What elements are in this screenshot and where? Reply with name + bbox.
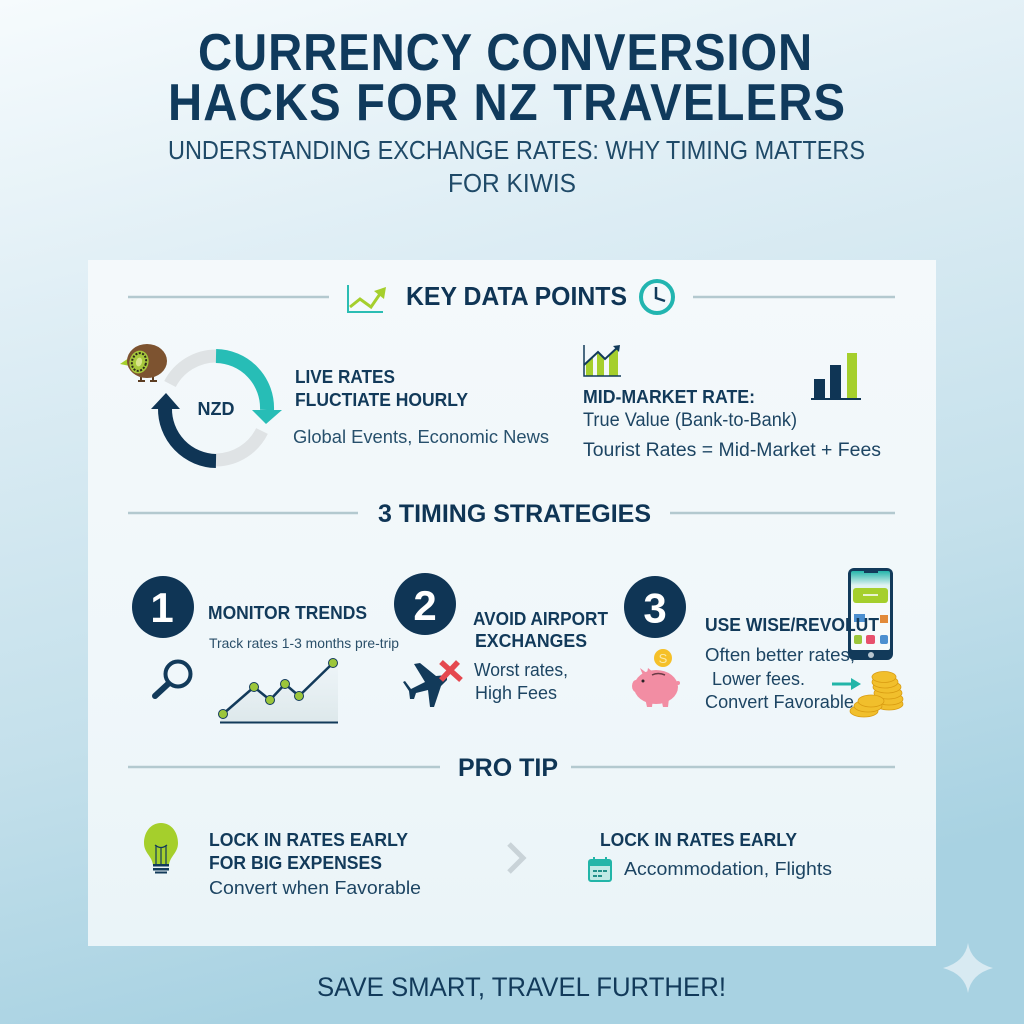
text: worst rates: Worst rates,: [474, 659, 568, 680]
icon: line chart: [348, 285, 386, 312]
icon: mid-market chart: [584, 345, 621, 376]
icon: magnifier: [155, 662, 190, 696]
ring diagram: [151, 356, 282, 461]
icon: sparkle: [943, 943, 993, 993]
text: lock in rates early for big expenses: LOCK IN RATES EARLY: [209, 830, 408, 850]
title: [168, 23, 845, 132]
text: track rates: Track rates 1-3 months pre-trip: [209, 635, 399, 651]
text: live rates: FLUCTIATE HOURLY: [295, 389, 469, 410]
text: mid-market rate: [583, 387, 881, 461]
badge: 1: [132, 576, 194, 638]
text: lock in rates early for big expenses: Convert when Favorable: [209, 877, 421, 898]
strategy 3: [624, 568, 903, 717]
icon: chevron: [509, 844, 523, 872]
icon: clock: [641, 281, 673, 313]
heading: key data points: KEY DATA POINTS: [406, 281, 627, 311]
arrow: [832, 678, 861, 690]
text: use wise/revolut: USE WISE/REVOLUT: [705, 615, 879, 635]
section: key data points: [120, 281, 881, 461]
text: mid-market rate: True Value (Bank-to-Bank): [583, 410, 797, 431]
text: live rates: Global Events, Economic News: [293, 427, 549, 447]
text: live rates: LIVE RATES: [295, 366, 395, 387]
heading: 3 timing strategies: 3 TIMING STRATEGIES: [378, 500, 651, 528]
text: live rates: [293, 366, 549, 447]
text: lock in rates early for big expenses: FOR BIG EXPENSES: [209, 853, 382, 873]
title: HACKS FOR NZ TRAVELERS: [168, 73, 845, 132]
text: often better rates: [705, 644, 855, 712]
section: pro tip: [144, 754, 832, 898]
subtitle: [168, 137, 865, 198]
text: worst rates: [474, 659, 568, 703]
strategy 2: [394, 573, 608, 707]
heading: pro tip: PRO TIP: [458, 754, 558, 782]
text: often better rates: Often better rates,: [705, 644, 855, 665]
icon: light bulb: [144, 823, 178, 874]
text: lock in rates early for big expenses: [209, 830, 421, 898]
text: mid-market rate: Tourist Rates = Mid-Market + Fees: [583, 440, 881, 461]
badge: 1: 1: [150, 584, 174, 631]
text: avoid airport exchanges: EXCHANGES: [475, 631, 587, 651]
badge: 2: [394, 573, 456, 635]
icon: bar chart: [811, 353, 861, 400]
icon: plane with cross: [403, 662, 461, 707]
icon: kiwi: [120, 344, 167, 381]
text: mid-market rate: MID-MARKET RATE:: [583, 387, 755, 407]
chart: trend line: [218, 658, 338, 722]
label: NZD: NZD: [198, 399, 234, 419]
text: worst rates: High Fees: [475, 682, 557, 703]
badge: 2: 2: [413, 582, 437, 629]
footer text: SAVE SMART, TRAVEL FURTHER!: [317, 972, 726, 1002]
main panel: [88, 260, 936, 946]
icon: piggy bank: [632, 649, 680, 707]
icon: piggy bank: S: [659, 651, 668, 666]
subtitle: UNDERSTANDING EXCHANGE RATES: WHY TIMING MATTERS: [168, 137, 865, 165]
text: monitor trends: MONITOR TRENDS: [208, 603, 367, 623]
text: avoid airport exchanges: [473, 609, 608, 651]
title: CURRENCY CONVERSION: [198, 23, 812, 82]
icon: phone: [848, 568, 893, 660]
text: often better rates: Lower fees.: [712, 668, 805, 689]
text: accommodation, flights: Accommodation, Flights: [624, 858, 832, 879]
badge: 3: [624, 576, 686, 638]
icon: calendar: [589, 857, 611, 881]
text: often better rates: Convert Favorable: [705, 691, 854, 712]
section: timing strategies: [132, 500, 903, 722]
text: avoid airport exchanges: AVOID AIRPORT: [473, 609, 608, 629]
text: lock in rates early: LOCK IN RATES EARLY: [600, 830, 797, 850]
subtitle: FOR KIWIS: [448, 170, 576, 198]
strategy 1: [132, 576, 399, 722]
icon: coins: [850, 672, 903, 717]
badge: 3: 3: [643, 584, 667, 632]
